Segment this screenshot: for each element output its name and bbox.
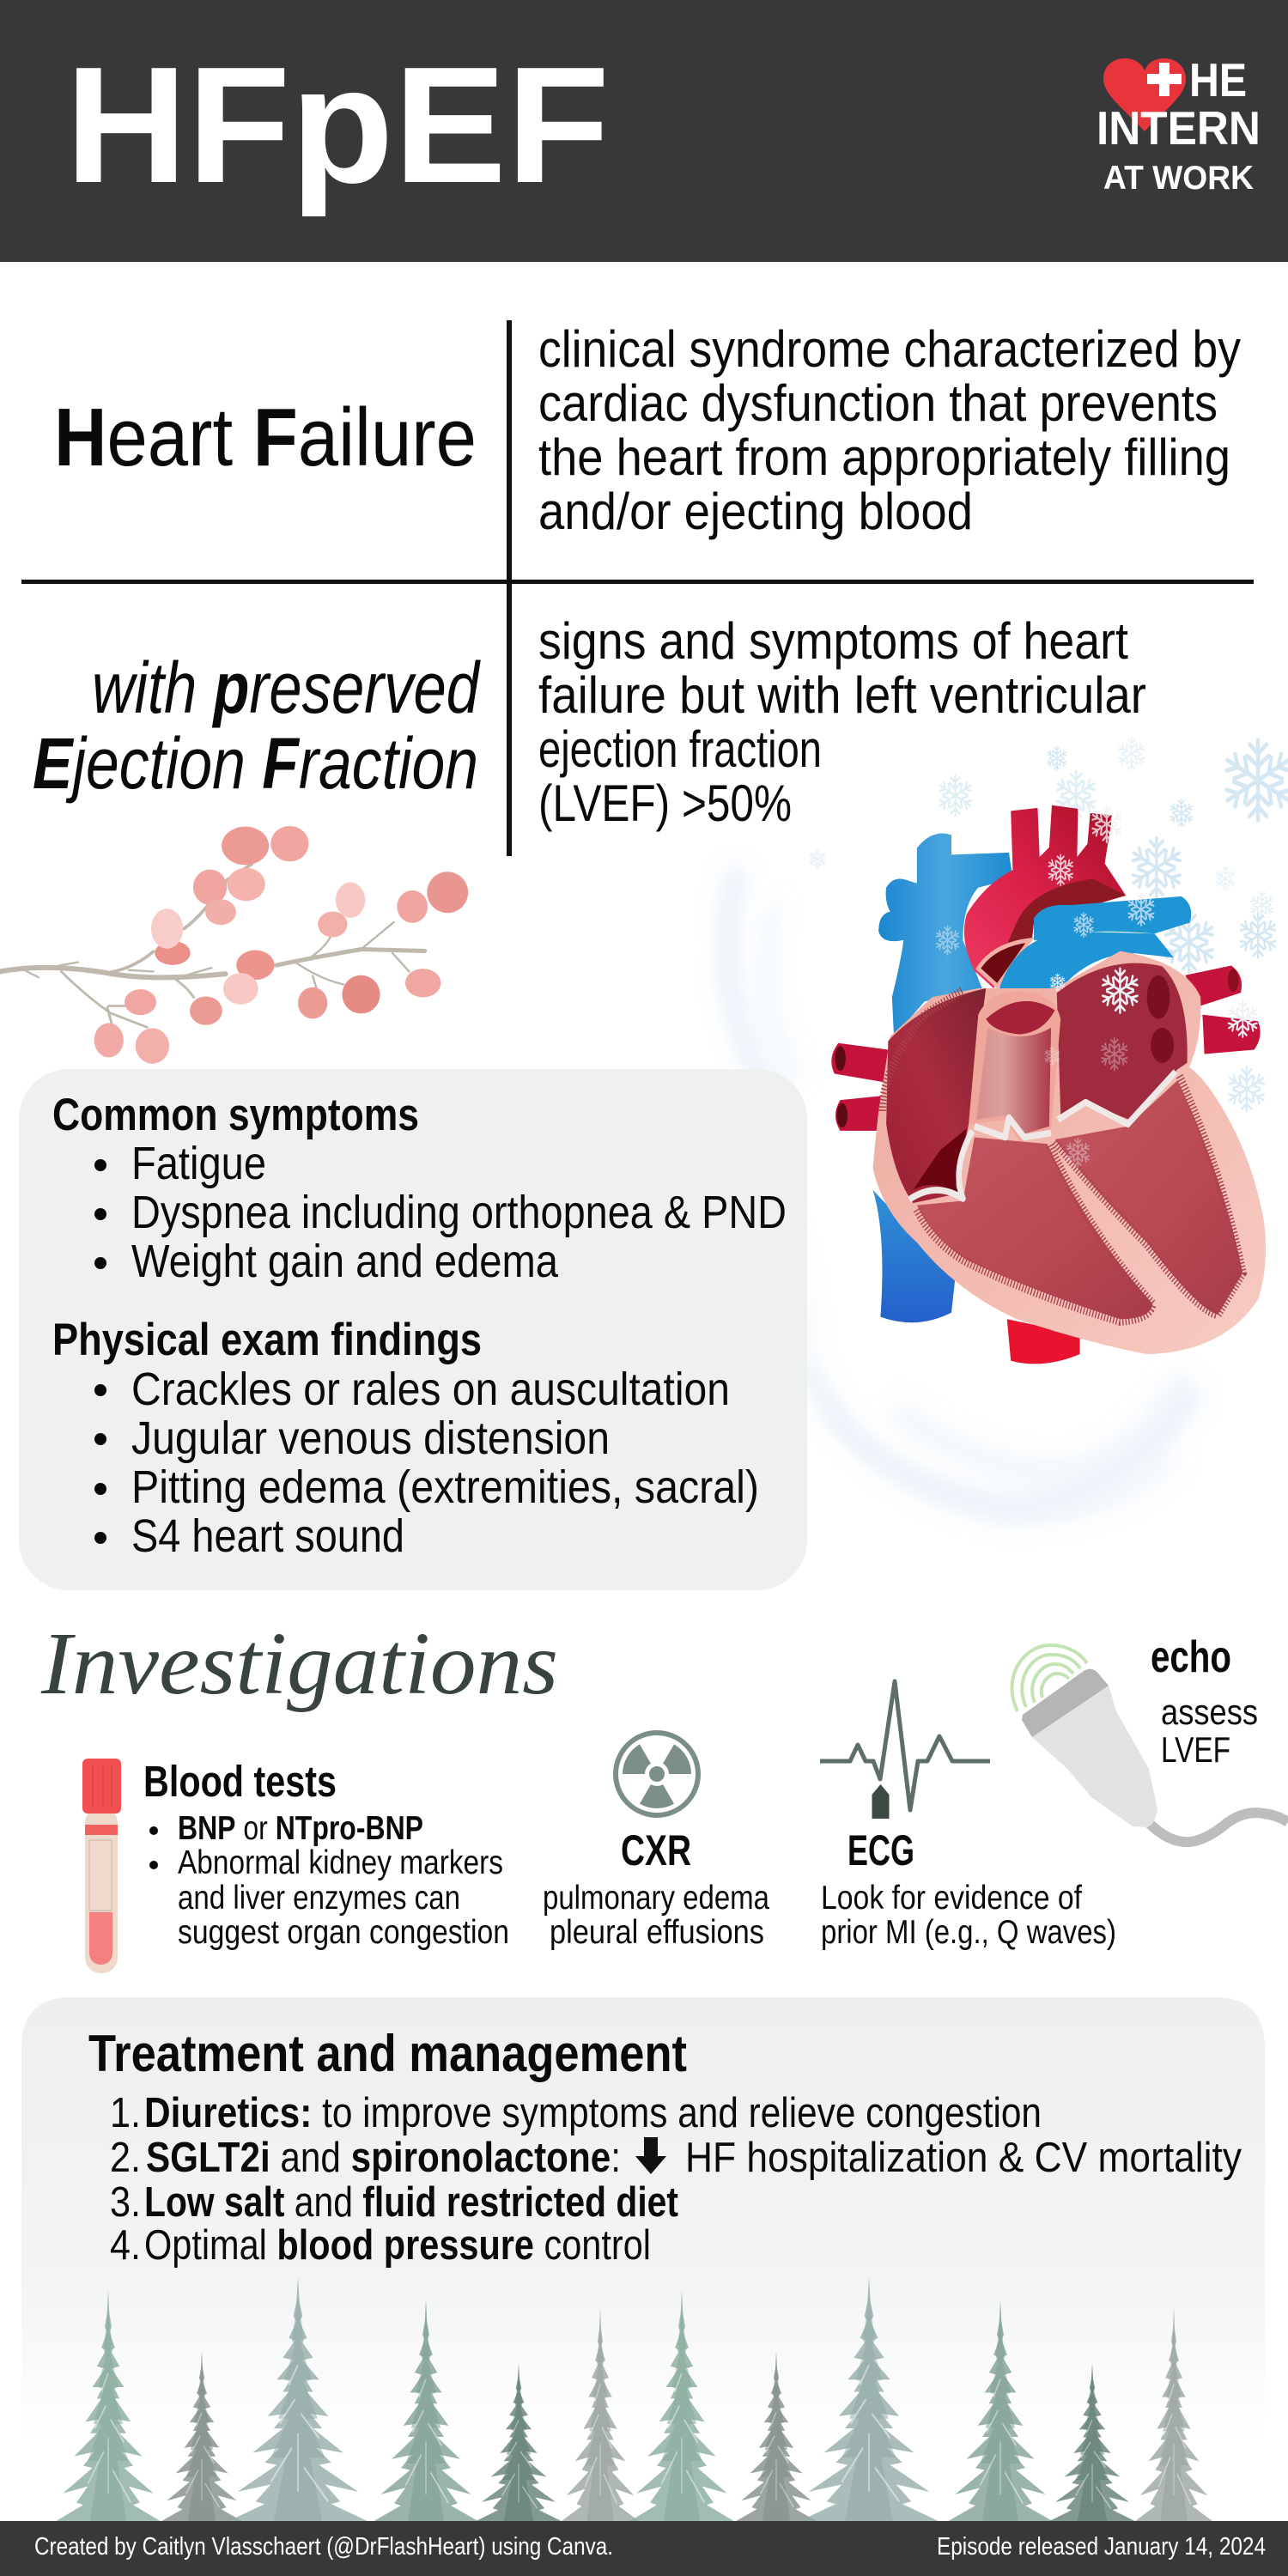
definition: preserved ejection fraction: (LVEF) >50% [538, 775, 792, 832]
heart muscle wall [873, 951, 1266, 1354]
text block: blood tests: and liver enzymes can [178, 1880, 460, 1917]
list: physical exam findings: Jugular venous distension [131, 1413, 610, 1464]
text block: echo: LVEF [1161, 1729, 1230, 1770]
list: common symptoms [94, 1138, 787, 1287]
definition: heart failure [538, 320, 1241, 540]
definition: preserved ejection fraction: failure but with left ventricular [538, 666, 1146, 724]
term: with preserved ejection fraction: with preserved [92, 647, 481, 728]
list: common symptoms: Dyspnea including orthopnea & PND [131, 1187, 787, 1238]
text block: ECG [821, 1826, 1116, 1951]
list: physical exam findings: S4 heart sound [131, 1510, 404, 1562]
numbered list: treatment: 2. [110, 2135, 141, 2181]
definition: preserved ejection fraction: ejection fraction [538, 720, 822, 778]
list: physical exam findings [94, 1364, 759, 1562]
footer bar [0, 2521, 1288, 2576]
aortic arch [964, 805, 1126, 988]
numbered list: treatment: Diuretics: to improve symptoms and relieve congestion [144, 2090, 1042, 2136]
text block: blood tests: Abnormal kidney markers [178, 1844, 503, 1881]
list: common symptoms: Weight gain and edema [131, 1236, 559, 1287]
logo: the intern at work: AT WORK [1103, 160, 1254, 197]
left ventricle [1055, 1080, 1242, 1315]
text block: CXR: pulmonary edema [543, 1880, 769, 1917]
pulmonary veins and great vessels [831, 965, 1261, 1131]
term: heart failure: Heart Failure [54, 392, 477, 483]
icon: radiation symbol [616, 1733, 698, 1815]
text block: echo: echo [1151, 1632, 1231, 1682]
text block: ECG: Look for evidence of [821, 1880, 1082, 1917]
definition table dividers [21, 320, 1254, 856]
heading: treatment and management: Treatment and management [88, 2025, 687, 2082]
footer credit: Created by Caitlyn Vlasschaert (@DrFlashHeart) using Canva. [34, 2533, 613, 2561]
inferior vena cava [873, 1190, 955, 1322]
numbered list: treatment: Low salt and fluid restricted diet [144, 2179, 678, 2226]
superior vena cava [878, 834, 1012, 1036]
pulmonary vein openings [1147, 975, 1174, 1063]
title: HFpEF [65, 32, 610, 217]
definition: heart failure: cardiac dysfunction that prevents [538, 374, 1218, 432]
heading: investigations: Investigations [40, 1614, 558, 1713]
text block: echo: assess [1161, 1692, 1258, 1732]
left atrium [1057, 963, 1188, 1120]
numbered list: treatment: 4. [110, 2222, 141, 2269]
text block: blood tests: BNP or NTpro-BNP [178, 1810, 423, 1847]
illustration: berry branch [0, 826, 468, 1064]
striated endocardium [883, 991, 1242, 1321]
logo: the intern at work [1097, 53, 1261, 197]
illustration: row of watercolor pine trees [56, 2277, 1212, 2521]
aortic outflow tract [969, 992, 1060, 1142]
right atrium dark floor [913, 1128, 967, 1199]
definition: heart failure: and/or ejecting blood [538, 483, 973, 540]
text block: CXR [543, 1826, 769, 1951]
definition: preserved ejection fraction: signs and symptoms of heart [538, 612, 1128, 670]
illustration: anatomical heart with snowflakes [808, 738, 1288, 1364]
text block: CXR: CXR [621, 1826, 691, 1874]
text block: echo [1151, 1632, 1258, 1770]
heading: physical exam findings: Physical exam findings [52, 1315, 482, 1365]
list: physical exam findings: Pitting edema (extremities, sacral) [131, 1461, 759, 1513]
numbered list: treatment: SGLT2i and spironolactone: [146, 2135, 621, 2181]
text block: CXR: pleural effusions [550, 1914, 764, 1951]
background snowflakes [808, 738, 1288, 1111]
text block: ECG: ECG [848, 1826, 914, 1874]
numbered list: treatment: HF hospitalization & CV mortality [685, 2135, 1242, 2181]
logo: the intern at work: INTERN [1097, 101, 1261, 155]
descending aorta [1007, 1319, 1080, 1364]
icon: ultrasound probe [1012, 1645, 1288, 1842]
text block: blood tests [143, 1757, 509, 1951]
list: physical exam findings: Crackles or rales on auscultation [131, 1364, 730, 1415]
panel: treatment and management [21, 1997, 1265, 2521]
numbered list: treatment: 1. [110, 2090, 141, 2136]
heart valves [909, 1072, 1176, 1200]
heading: common symptoms: Common symptoms [52, 1090, 419, 1140]
definition: preserved ejection fraction [538, 612, 1146, 832]
background swirl behind heart [727, 867, 1195, 1520]
numbered list: treatment: Optimal blood pressure control [144, 2222, 651, 2269]
pulmonary artery [999, 896, 1191, 993]
foreground snowflakes [935, 806, 1259, 1167]
term: with preserved ejection fraction: Ejection Fraction [33, 723, 478, 804]
icon: blood tube [82, 1759, 121, 1973]
text block: ECG: prior MI (e.g., Q waves) [821, 1914, 1116, 1951]
right atrium [886, 988, 986, 1203]
list: common symptoms: Fatigue [131, 1138, 266, 1189]
logo: the intern at work: HE [1189, 53, 1247, 106]
numbered list: treatment [110, 2090, 1242, 2269]
text block: blood tests: suggest organ congestion [178, 1914, 509, 1951]
definition: heart failure: the heart from appropriately filling [538, 428, 1230, 486]
term: with preserved ejection fraction [33, 647, 481, 804]
header bar [0, 0, 1288, 262]
panel: symptoms and exam findings [19, 1069, 807, 1590]
numbered list: treatment: 3. [110, 2179, 141, 2226]
right ventricle [917, 1137, 1152, 1319]
icon: ECG trace [820, 1681, 990, 1819]
text block: blood tests: Blood tests [143, 1757, 337, 1806]
